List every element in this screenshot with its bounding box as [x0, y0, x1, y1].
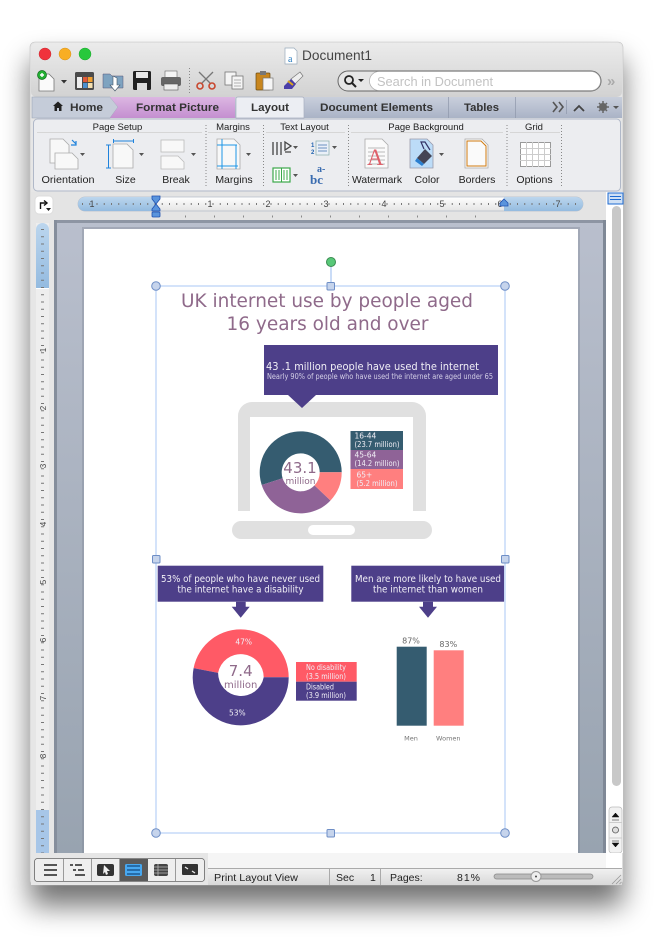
status bar	[31, 853, 622, 885]
ruler area background	[31, 192, 622, 220]
icon: grid options	[520, 142, 551, 167]
icon: break	[161, 140, 184, 169]
selection frame and handles	[152, 258, 509, 837]
title bar and toolbar background	[31, 43, 622, 97]
donut chart: disability	[193, 629, 289, 725]
group labels	[93, 122, 543, 133]
ribbon panel	[34, 119, 620, 191]
bar chart: men and women: Men	[404, 734, 418, 742]
icon: columns and hyphenation: 2	[311, 150, 315, 156]
legend: age groups: 16-44	[354, 432, 377, 440]
vertical ruler: 4	[39, 521, 48, 526]
horizontal ruler: 5	[439, 199, 445, 209]
callout: disability: 53% of people who have never used	[161, 574, 320, 585]
button labels: Options	[516, 174, 553, 186]
group labels: Text Layout	[280, 122, 329, 133]
icon: paste	[256, 71, 273, 90]
callout: disability	[158, 566, 323, 618]
callout: total users: Nearly 90% of people who have used the internet are aged under 65	[267, 372, 493, 381]
icon: scissors	[197, 72, 215, 89]
legend: disability: (3.9 million)	[306, 691, 346, 700]
legend: age groups: (14.2 million)	[354, 459, 400, 468]
button labels: Watermark	[352, 174, 403, 186]
title	[181, 290, 473, 335]
horizontal ruler: 1	[89, 199, 95, 209]
status bar: 1	[370, 872, 376, 884]
callout: men and women: Men are more likely to have used	[355, 574, 501, 585]
indent markers	[152, 196, 508, 217]
callout: men and women: the internet than women	[373, 584, 483, 596]
vertical ruler: 7	[39, 695, 48, 700]
vertical ruler: 3	[39, 463, 48, 468]
donut chart: disability: million	[224, 680, 257, 691]
donut chart: disability: 7.4	[229, 662, 253, 680]
button labels: Size	[115, 174, 136, 186]
horizontal ruler: 7	[555, 199, 561, 209]
bar chart: men and women: 87%	[402, 636, 420, 645]
ribbon tabs: Tables	[464, 102, 499, 114]
group labels: Page Setup	[93, 122, 142, 133]
callout: men and women	[351, 566, 504, 618]
document title: Document1	[302, 48, 372, 63]
tab stop selector	[35, 196, 53, 214]
ribbon tabs: Layout	[251, 102, 289, 114]
icon: borders	[465, 139, 488, 168]
button labels	[42, 174, 553, 186]
infographic	[158, 290, 504, 742]
icon: columns and hyphenation	[273, 141, 337, 187]
icon: columns and hyphenation: bc	[310, 172, 323, 187]
horizontal ruler: 4	[381, 199, 387, 209]
icon: home	[53, 102, 63, 111]
ribbon tabs	[32, 97, 622, 118]
legend: age groups: 65+	[356, 470, 372, 480]
view mode buttons	[34, 858, 204, 882]
bar chart: men and women: 83%	[439, 640, 458, 649]
button labels: Borders	[459, 174, 495, 186]
horizontal ruler	[78, 196, 583, 217]
icon: save	[133, 71, 151, 90]
page	[84, 229, 578, 853]
button labels: Color	[414, 174, 440, 186]
document workspace	[54, 220, 606, 853]
title: 16 years old and over	[226, 313, 429, 335]
icon: margins	[217, 139, 240, 169]
horizontal ruler: 2	[265, 199, 271, 209]
donut chart: disability: 53%	[229, 709, 246, 718]
vertical scrollbar	[606, 192, 623, 853]
icon: format painter	[284, 72, 303, 89]
group labels: Page Background	[388, 122, 464, 133]
search field: »	[607, 73, 615, 90]
search field: Search in Document	[377, 74, 493, 89]
vertical ruler: 1	[39, 347, 48, 352]
document title: a	[288, 54, 293, 65]
vertical ruler: 5	[39, 579, 48, 584]
legend: age groups: (23.7 million)	[354, 440, 400, 449]
ribbon tabs: Home	[70, 102, 103, 114]
horizontal ruler: 1	[207, 199, 213, 209]
donut chart: age groups	[260, 431, 342, 513]
bar chart: men and women: Women	[436, 734, 461, 742]
icon: columns and hyphenation: a-	[317, 164, 325, 175]
icon: watermark	[365, 139, 388, 170]
icon: gallery	[75, 72, 94, 90]
button labels: Break	[162, 174, 190, 186]
vertical ruler: 6	[39, 637, 48, 642]
donut chart: disability: 47%	[235, 638, 252, 647]
icon: columns and hyphenation: 1	[311, 143, 315, 149]
donut chart: age groups: 43.1	[283, 459, 317, 477]
vertical ruler	[36, 223, 49, 853]
standard toolbar icons	[38, 68, 303, 95]
callout: total users	[264, 345, 498, 408]
legend: disability: No disability	[306, 663, 346, 672]
search field	[338, 71, 615, 91]
vertical ruler: 2	[39, 405, 48, 410]
icon: open folder	[103, 74, 123, 91]
icon: watermark: A	[367, 145, 384, 170]
icon: orientation	[50, 139, 78, 169]
status bar: Pages:	[390, 872, 423, 884]
legend: age groups: 45-64	[354, 450, 377, 460]
ribbon tabs: Document Elements	[320, 102, 433, 114]
group labels: Grid	[525, 122, 543, 133]
legend: age groups: (5.2 million)	[356, 479, 398, 488]
icon: new document	[38, 70, 67, 91]
legend: disability: Disabled	[306, 682, 334, 692]
donut chart: age groups: million	[286, 477, 315, 487]
icon: copy	[225, 72, 243, 89]
callout: disability: the internet have a disability	[178, 584, 304, 596]
traffic light buttons	[39, 48, 91, 60]
status bar: 81%	[457, 872, 481, 884]
legend: disability	[296, 662, 357, 701]
icon: color	[410, 139, 433, 168]
icon: print	[161, 71, 181, 90]
horizontal ruler: 6	[497, 199, 503, 209]
bar chart: men and women	[397, 636, 464, 742]
group labels: Margins	[216, 122, 250, 133]
callout: total users: 43 .1 million people have used the internet	[266, 361, 479, 373]
horizontal ruler: 3	[323, 199, 329, 209]
status bar: Print Layout View	[214, 872, 298, 884]
vertical ruler: 8	[39, 753, 48, 758]
legend: disability: (3.5 million)	[306, 672, 346, 681]
icon: size	[106, 139, 134, 168]
button labels: Margins	[215, 174, 253, 186]
ribbon tabs: Format Picture	[136, 102, 219, 114]
legend: age groups	[350, 431, 403, 489]
title: UK internet use by people aged	[181, 290, 473, 312]
button labels: Orientation	[42, 174, 95, 186]
status bar: Sec	[336, 872, 354, 884]
icon: laptop	[232, 402, 432, 539]
